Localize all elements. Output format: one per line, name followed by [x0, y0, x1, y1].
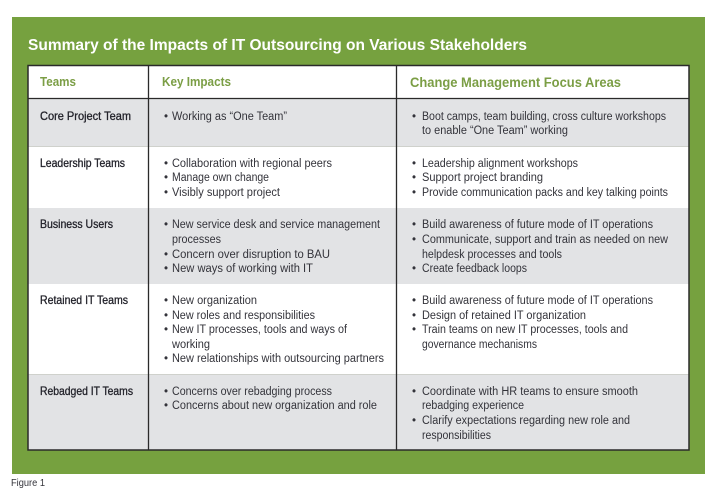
- header: key impacts: Key Impacts: [162, 74, 231, 89]
- focus areas: [412, 111, 666, 137]
- row separators: [28, 146, 689, 374]
- key impacts: •: [164, 400, 168, 412]
- key impacts: •: [164, 187, 168, 199]
- key impacts: New organization: [172, 295, 257, 307]
- table grid lines: [28, 65, 689, 450]
- row shading: rebadged IT teams: [28, 374, 689, 450]
- key impacts: [164, 219, 381, 275]
- focus areas: •: [412, 295, 416, 307]
- figure caption: Figure 1: [11, 477, 45, 489]
- key impacts: •: [164, 353, 168, 365]
- key impacts: •: [164, 219, 168, 231]
- title: Summary of the Impacts of IT Outsourcing on Various Stakeholders: [28, 37, 527, 54]
- key impacts: Working as “One Team”: [172, 111, 287, 123]
- focus areas: •: [412, 219, 416, 231]
- key impacts: New service desk and service management: [172, 219, 381, 231]
- row: leadership teams: [40, 156, 668, 199]
- focus areas: Create feedback loops: [422, 263, 527, 275]
- table: [28, 65, 689, 450]
- key impacts: •: [164, 172, 168, 184]
- row shading: business users: [28, 208, 689, 284]
- focus areas: •: [412, 386, 416, 398]
- key impacts: New IT processes, tools and ways of: [172, 324, 348, 336]
- key impacts: New relationships with outsourcing partners: [172, 353, 384, 365]
- focus areas: Leadership alignment workshops: [422, 158, 578, 170]
- key impacts: •: [164, 158, 168, 170]
- row: retained IT teams: [40, 293, 653, 365]
- focus areas: Train teams on new IT processes, tools and: [422, 324, 628, 336]
- key impacts: •: [164, 263, 168, 275]
- focus areas: [412, 158, 668, 199]
- key impacts: •: [164, 324, 168, 336]
- key impacts: •: [164, 249, 168, 261]
- focus areas: Build awareness of future mode of IT operations: [422, 219, 653, 231]
- focus areas: rebadging experience: [422, 400, 524, 412]
- focus areas: Build awareness of future mode of IT operations: [422, 295, 653, 307]
- focus areas: governance mechanisms: [422, 339, 537, 351]
- row: core project team: [40, 109, 666, 137]
- team name: Rebadged IT Teams: [40, 384, 133, 398]
- focus areas: responsibilities: [422, 430, 491, 442]
- focus areas: to enable “One Team” working: [422, 125, 568, 137]
- focus areas: •: [412, 187, 416, 199]
- key impacts: Visibly support project: [172, 187, 281, 199]
- focus areas: •: [412, 172, 416, 184]
- team name: Core Project Team: [40, 109, 131, 123]
- team name: Retained IT Teams: [40, 293, 128, 307]
- focus areas: •: [412, 310, 416, 322]
- focus areas: [412, 295, 653, 351]
- focus areas: Design of retained IT organization: [422, 310, 586, 322]
- focus areas: Support project branding: [422, 172, 543, 184]
- key impacts: [164, 295, 384, 365]
- focus areas: •: [412, 415, 416, 427]
- key impacts: [164, 386, 377, 412]
- key impacts: processes: [172, 234, 221, 246]
- key impacts: •: [164, 295, 168, 307]
- focus areas: •: [412, 263, 416, 275]
- focus areas: •: [412, 234, 416, 246]
- focus areas: [412, 219, 669, 275]
- focus areas: •: [412, 324, 416, 336]
- row: business users: [40, 217, 669, 275]
- focus areas: •: [412, 111, 416, 123]
- focus areas: Communicate, support and train as needed on new: [422, 234, 669, 246]
- focus areas: Coordinate with HR teams to ensure smooth: [422, 386, 638, 398]
- key impacts: [164, 158, 332, 199]
- focus areas: •: [412, 158, 416, 170]
- header: teams: Teams: [40, 74, 76, 89]
- key impacts: Concerns over rebadging process: [172, 386, 332, 398]
- key impacts: New roles and responsibilities: [172, 310, 315, 322]
- key impacts: •: [164, 310, 168, 322]
- focus areas: Provide communication packs and key talking points: [422, 187, 668, 199]
- row: rebadged IT teams: [40, 384, 638, 442]
- key impacts: New ways of working with IT: [172, 263, 313, 275]
- focus areas: helpdesk processes and tools: [422, 249, 562, 261]
- team name: Leadership Teams: [40, 156, 125, 170]
- key impacts: Concerns about new organization and role: [172, 400, 377, 412]
- key impacts: •: [164, 386, 168, 398]
- key impacts: working: [171, 339, 210, 351]
- key impacts: Collaboration with regional peers: [172, 158, 332, 170]
- team name: Business Users: [40, 217, 113, 231]
- table background: [28, 65, 689, 450]
- row shading: core project team: [28, 98, 689, 146]
- key impacts: Concern over disruption to BAU: [172, 249, 330, 261]
- focus areas: Boot camps, team building, cross culture workshops: [422, 111, 666, 123]
- key impacts: •: [164, 111, 168, 123]
- focus areas: Clarify expectations regarding new role and: [422, 415, 630, 427]
- header: change management focus areas: Change Management Focus Areas: [410, 75, 621, 90]
- column headers: [40, 74, 621, 90]
- key impacts: Manage own change: [172, 172, 269, 184]
- focus areas: [412, 386, 638, 442]
